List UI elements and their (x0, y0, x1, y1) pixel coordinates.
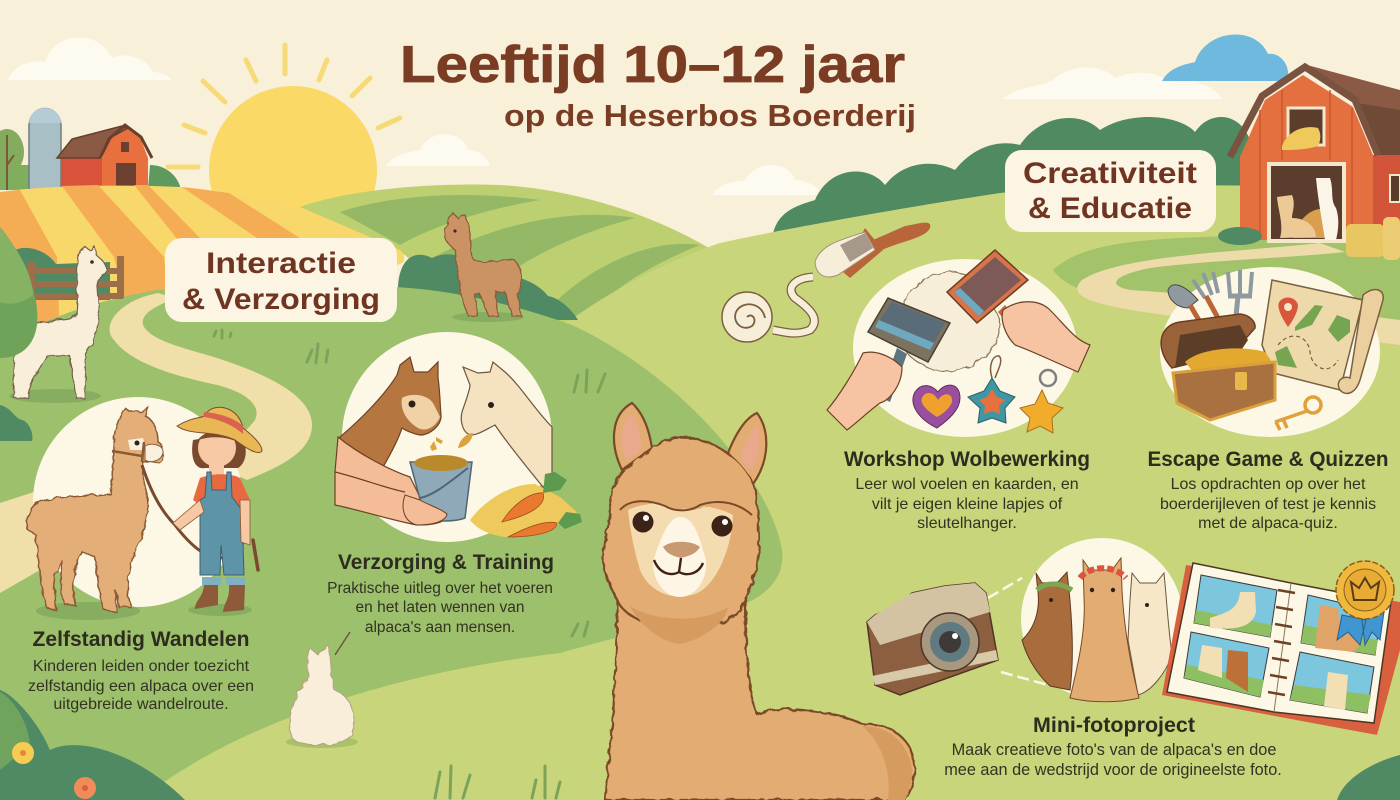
description: Los opdrachten op over het (1171, 476, 1366, 493)
ears (614, 403, 766, 484)
small bush left (0, 405, 33, 441)
white alpaca by fence (9, 246, 106, 403)
heading: Zelfstandig Wandelen (32, 628, 250, 651)
label: Interactie & Verzorging: Interactie (206, 247, 356, 280)
label: Creativiteit & Educatie (1005, 150, 1216, 232)
illustration: feeding alpacas with bucket (335, 332, 582, 542)
description: sleutelhanger. (917, 515, 1017, 532)
field: yellow striped hill (0, 185, 404, 340)
illustration: camera, three alpacas and photo album (867, 538, 1400, 735)
fence (25, 256, 124, 302)
panel: workshop wolbewerking (722, 223, 1090, 532)
illustration: sitting white alpaca (286, 632, 358, 748)
description: alpaca's aan mensen. (365, 619, 515, 636)
winding path right (1077, 243, 1400, 345)
label: Interactie & Verzorging (165, 238, 397, 322)
chest shade (630, 606, 728, 644)
description: Maak creatieve foto's van de alpaca's en doe (952, 741, 1276, 759)
description: Praktische uitleg over het voeren (327, 580, 553, 597)
description: en het laten wennen van (356, 599, 524, 616)
bushes behind left hill (398, 254, 578, 320)
description: boerderijleven of test je kennis (1160, 496, 1376, 513)
title: op de Heserbos Boerderij (504, 98, 916, 133)
label: Creativiteit & Educatie: & Educatie (1028, 192, 1192, 225)
tail shade (862, 726, 912, 800)
illustration: treasure chest, tools, map and key (1160, 267, 1383, 437)
illustration: child walking an alpaca (27, 397, 262, 620)
dark bush behind fence (8, 248, 110, 300)
label: Creativiteit & Educatie: Creativiteit (1023, 157, 1197, 190)
right hill (0, 185, 1400, 800)
fringe (618, 446, 756, 515)
large red barn (1218, 65, 1400, 260)
panel: escape game en quizzen (1148, 267, 1388, 532)
heading: Escape Game & Quizzen (1148, 448, 1388, 471)
description: vilt je eigen kleine lapjes of (872, 496, 1063, 513)
panel: mini-fotoproject (867, 538, 1400, 779)
description: Leer wol voelen en kaarden, en (855, 476, 1079, 493)
bottom-left bushes and flowers (0, 690, 185, 800)
panel: verzorging en training (327, 332, 582, 636)
icon: sun with rays (168, 45, 400, 254)
description: uitgebreide wandelroute. (53, 696, 229, 713)
description: mee aan de wedstrijd voor de origineelste foto. (944, 761, 1282, 779)
darker band below big barn (1053, 236, 1400, 330)
left edge tree (0, 227, 37, 358)
clouds (8, 34, 1288, 195)
label: Interactie & Verzorging: & Verzorging (182, 283, 380, 316)
face (628, 503, 733, 597)
heading: Workshop Wolbewerking (844, 448, 1090, 471)
title: Leeftijd 10–12 jaar (400, 36, 905, 94)
green foreground hill (0, 286, 782, 800)
winding path left (110, 293, 312, 480)
panel: zelfstandig wandelen (27, 397, 262, 713)
central alpaca (604, 403, 915, 800)
illustration: wool carding brushes, yarn and keychains (722, 223, 1090, 437)
bottom-right bush (1337, 755, 1400, 800)
description: Kinderen leiden onder toezicht (33, 658, 250, 675)
winding path lower left (0, 490, 40, 593)
description: met de alpaca-quiz. (1198, 515, 1338, 532)
left farm: tree, silo and barn (0, 108, 181, 190)
brown alpaca on hill (445, 213, 524, 322)
right tree line (772, 117, 1250, 240)
title (400, 36, 916, 133)
hill: green striped (300, 184, 735, 330)
grass tufts (214, 330, 605, 798)
heading: Mini-fotoproject (1033, 714, 1195, 737)
head fluff (604, 437, 759, 628)
body and neck (605, 600, 915, 800)
description: zelfstandig een alpaca over een (28, 678, 254, 695)
heading: Verzorging & Training (338, 551, 554, 574)
